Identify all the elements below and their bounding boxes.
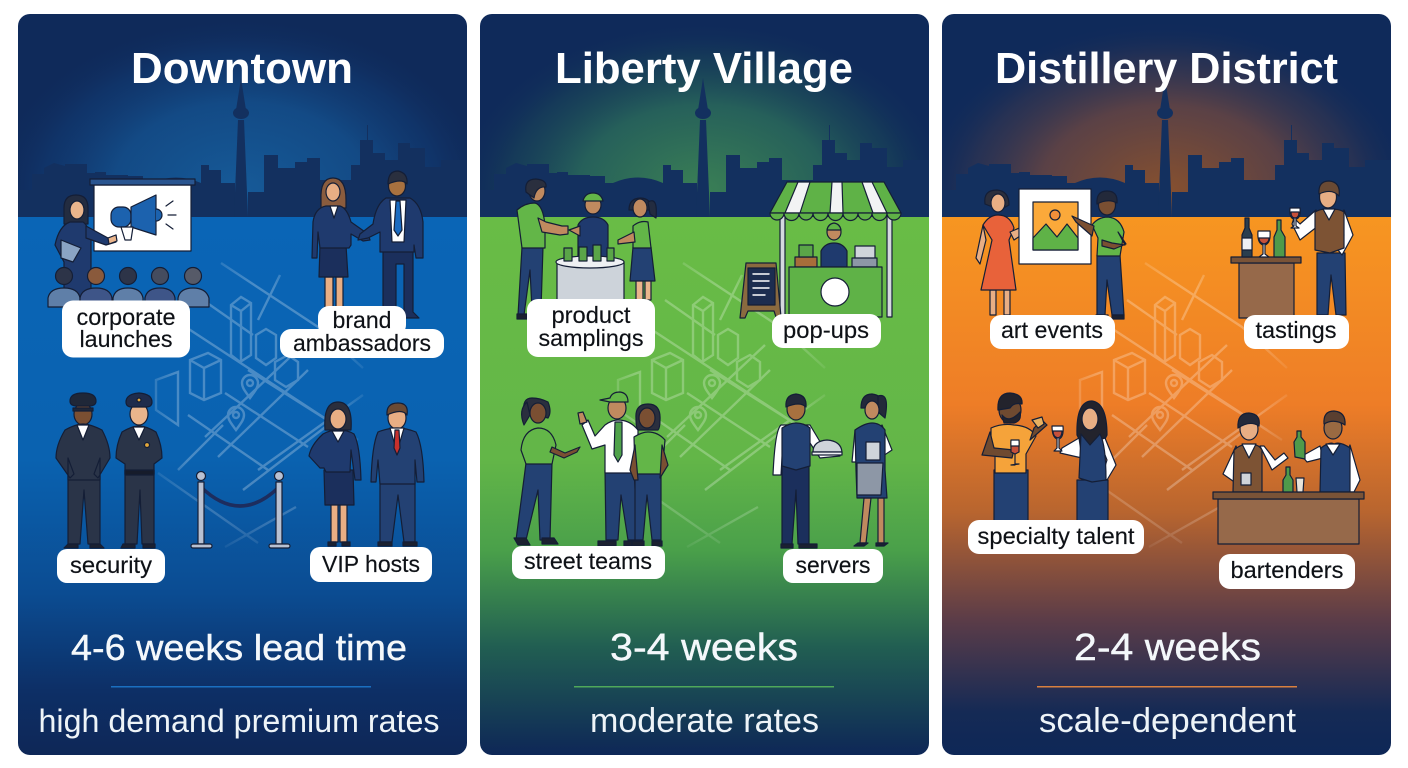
figure: specialty talent woman [1052, 401, 1116, 522]
label: tastings: tastings [1256, 317, 1336, 343]
divider [1037, 686, 1297, 688]
skyline [942, 78, 1391, 217]
figure: security guard one [56, 393, 110, 548]
label: bartenders [1219, 554, 1355, 589]
label: VIP hosts: VIP hosts [322, 551, 420, 577]
figure: male server with cloche [773, 394, 842, 548]
rates note: scale-dependent [1039, 702, 1297, 740]
label: specialty talent [968, 520, 1144, 554]
figure: female server with apron [852, 394, 892, 546]
label: product samplings: samplings [538, 325, 644, 351]
figure: street team woman right [630, 404, 668, 546]
figure: brand ambassador man [358, 171, 423, 318]
label: corporate launches: launches [80, 326, 172, 352]
icon: tasting table with bottles [1231, 218, 1301, 318]
heading: Liberty Village: Liberty Village [555, 44, 853, 93]
heading: Downtown: Downtown [131, 44, 353, 93]
panel: Downtown [18, 14, 467, 756]
panel background [480, 14, 929, 756]
label: servers [783, 549, 883, 583]
label: bartenders: bartenders [1230, 557, 1344, 583]
label: street teams [512, 546, 665, 579]
icon: bar counter with bottle and glass [1213, 467, 1364, 544]
panel background [18, 14, 467, 756]
label: pop-ups: pop-ups [783, 317, 869, 343]
divider [111, 686, 371, 688]
label: brand ambassadors: ambassadors [293, 330, 431, 356]
icon: framed artwork [1019, 189, 1091, 264]
label: servers: servers [796, 552, 870, 578]
figure: security guard two [116, 393, 162, 548]
lead time: 4-6 weeks lead time [71, 627, 407, 668]
label: security [57, 549, 165, 583]
icon: velvet rope stanchions [191, 472, 290, 548]
label: corporate launches: corporate [76, 304, 176, 330]
figure: specialty talent man [982, 393, 1047, 522]
figure: bartender right [1294, 411, 1360, 492]
lead time: 3-4 weeks [610, 627, 798, 669]
label: pop-ups [772, 314, 881, 348]
label: art events [990, 315, 1115, 349]
panel background [942, 14, 1391, 756]
icon: a-frame menu board [740, 263, 781, 318]
figure: brand ambassador woman [312, 178, 370, 310]
figure: seated audience [48, 268, 209, 307]
skyline [480, 78, 929, 217]
label: corporate launches [62, 300, 190, 358]
lead time: 2-4 weeks [1074, 627, 1261, 669]
label: security: security [70, 552, 153, 578]
icon: sampling table with cups [556, 245, 624, 302]
label: street teams: street teams [524, 548, 652, 574]
city map watermark [1080, 263, 1287, 547]
figure: street team woman left [514, 398, 580, 545]
icon: presentation screen with megaphone [90, 179, 195, 251]
rates note: moderate rates [590, 702, 819, 740]
figure: VIP host woman [309, 402, 361, 546]
label: tastings [1244, 315, 1349, 349]
figure: sampling server [569, 193, 608, 258]
figure: sampling guest [517, 179, 568, 319]
figure: art event woman [976, 190, 1034, 315]
label: VIP hosts [310, 547, 432, 582]
figure: street team leader [578, 392, 642, 546]
rates note: high demand premium rates [38, 703, 439, 739]
label: specialty talent: specialty talent [978, 523, 1135, 549]
skyline [18, 78, 467, 217]
figure: art event man [1072, 191, 1126, 319]
label: art events: art events [1001, 317, 1103, 343]
divider [574, 686, 834, 688]
figure: sampling woman [618, 198, 656, 300]
figure: presenter [55, 195, 117, 300]
figure: VIP host man [371, 403, 424, 546]
label: brand ambassadors [280, 306, 444, 358]
heading: Distillery District: Distillery District [995, 44, 1338, 93]
label: product samplings [527, 299, 655, 357]
label: brand ambassadors: brand [332, 307, 392, 333]
city map watermark [156, 263, 363, 547]
panel: Distillery District [942, 14, 1391, 756]
icon: pop-up booth [770, 182, 901, 317]
figure: sommelier [1290, 181, 1353, 315]
panel: Liberty Village [480, 14, 929, 756]
label: product samplings: product [552, 302, 631, 328]
figure: bartender left [1223, 413, 1288, 492]
city map watermark [618, 263, 825, 547]
